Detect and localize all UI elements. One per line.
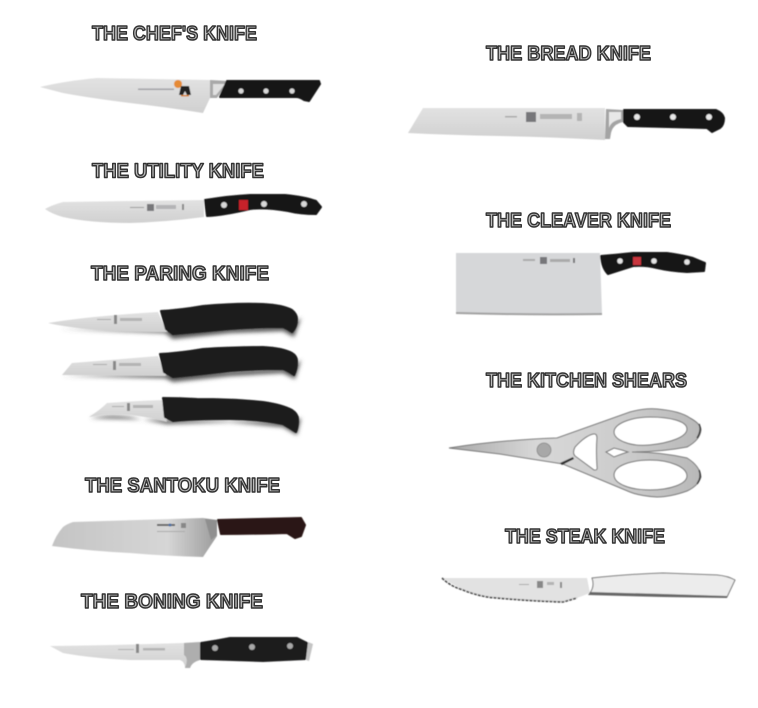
heading: cleaver knife: THE CLEAVER KNIFE — [486, 210, 671, 232]
knife: paring 3 — [89, 398, 301, 435]
heading: paring knife: THE PARING KNIFE — [91, 263, 269, 285]
heading: kitchen shears: THE KITCHEN SHEARS — [486, 370, 687, 392]
heading: santoku knife: THE SANTOKU KNIFE — [85, 475, 280, 497]
knife: paring 1 — [48, 304, 301, 339]
knife: boning — [50, 638, 313, 668]
heading: boning knife: THE BONING KNIFE — [81, 591, 263, 613]
knife: bread — [408, 108, 724, 140]
heading: chef's knife: THE CHEF'S KNIFE — [92, 23, 257, 45]
knife: steak — [442, 573, 735, 602]
knife: chef's — [40, 78, 320, 113]
knife: utility — [45, 195, 321, 223]
knife: cleaver — [456, 253, 705, 315]
knife: paring 2 — [62, 347, 301, 382]
icon: kitchen shears — [449, 409, 701, 497]
heading: steak knife: THE STEAK KNIFE — [505, 526, 665, 548]
knife: santoku — [52, 518, 305, 557]
heading: bread knife: THE BREAD KNIFE — [486, 43, 651, 65]
heading: utility knife: THE UTILITY KNIFE — [92, 160, 264, 182]
